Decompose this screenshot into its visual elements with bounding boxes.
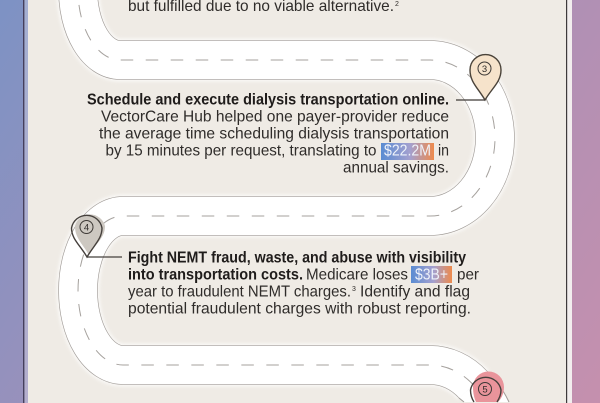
text block: schedule dialysis transportation: $22.2M (384, 142, 431, 160)
text block: fight NEMT fraud: 3 (352, 286, 356, 293)
text block: fight NEMT fraud: Medicare loses (306, 266, 408, 284)
text block: fight NEMT fraud: $3B+ (415, 266, 448, 284)
pin 5: 5 (482, 384, 488, 396)
footnote marker 2: 2 (395, 1, 399, 8)
text block: schedule dialysis transportation (87, 92, 449, 176)
text block: schedule dialysis transportation: in (438, 142, 449, 160)
pin 3: 3 (482, 64, 487, 75)
text block: schedule dialysis transportation: Schedule and execute dialysis transportation online. (87, 92, 449, 108)
pin 4 (72, 214, 122, 257)
text block: fight NEMT fraud: potential fraudulent charges with robust reporting. (128, 300, 471, 318)
text block: schedule dialysis transportation: annual savings. (343, 160, 449, 176)
text block: fight NEMT fraud: Identify and flag (360, 284, 470, 300)
text block: fight NEMT fraud: Fight NEMT fraud, waste, and abuse with visibility (128, 250, 466, 266)
pin 5 (470, 372, 504, 402)
text block: fight NEMT fraud: into transportation costs. (128, 266, 303, 284)
text block: fight NEMT fraud (128, 250, 480, 318)
text block: schedule dialysis transportation: VectorCare Hub helped one payer-provider reduce (101, 108, 449, 126)
text block: schedule dialysis transportation: by 15 minutes per request, translating to (106, 142, 377, 160)
pin 4: 4 (84, 222, 89, 234)
text block: schedule dialysis transportation: the average time scheduling dialysis transportation (99, 126, 449, 142)
pin 3 (456, 55, 501, 100)
winding road (78, 0, 509, 402)
text block: fight NEMT fraud: per (457, 266, 480, 284)
text block: fight NEMT fraud: year to fraudulent NEMT charges. (128, 284, 351, 300)
